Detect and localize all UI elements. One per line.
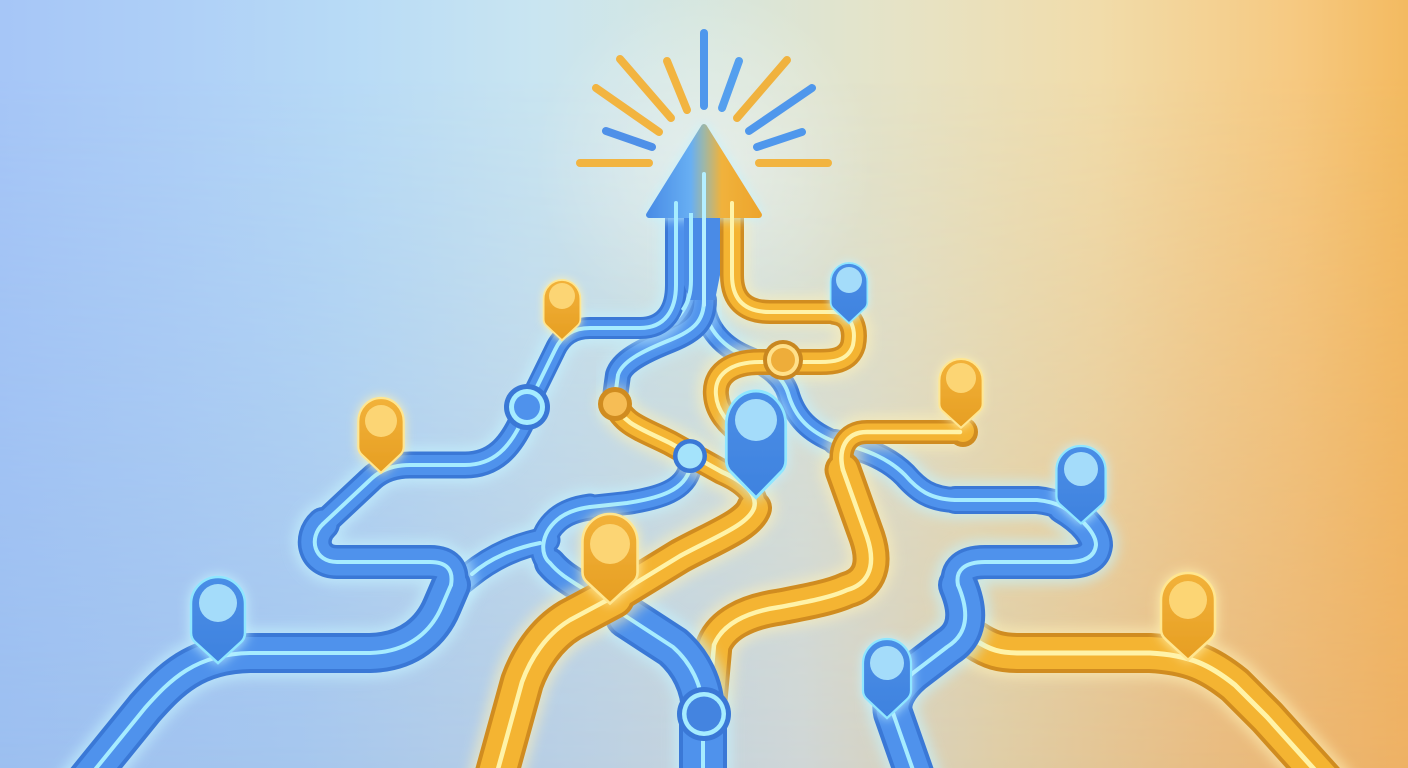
node: orange ring: [763, 340, 803, 380]
route: blue right winding from arrow to bottom: [704, 175, 1096, 768]
route: blue inner branches to left node: [614, 205, 704, 404]
pin: orange left: [358, 398, 404, 473]
pin: blue lower right: [863, 639, 911, 718]
node: blue ring upper left: [504, 384, 550, 430]
pin: orange far right: [1161, 573, 1215, 660]
route: orange centre: [709, 417, 978, 700]
route: orange right: [975, 640, 1340, 768]
node: blue ring bottom: [677, 687, 731, 741]
route: blue left long path: [72, 205, 676, 768]
pin: blue upper right: [831, 263, 867, 323]
pin: blue centre large: [726, 391, 786, 498]
pin: orange right upper: [939, 359, 983, 428]
pin: orange centre: [582, 514, 638, 603]
pin: orange upper left: [544, 280, 580, 340]
node: blue small: [673, 439, 707, 473]
node: orange left: [598, 387, 632, 421]
sunburst rays above arrow: [580, 33, 828, 163]
route: orange left-centre crossing: [495, 404, 755, 768]
icon: arrow head and shaft: [649, 127, 759, 312]
pin: blue bottom left: [191, 577, 245, 663]
route: orange top loop: [716, 205, 854, 435]
pin: blue right: [1056, 446, 1106, 523]
route: blue middle to bottom node: [451, 456, 703, 768]
